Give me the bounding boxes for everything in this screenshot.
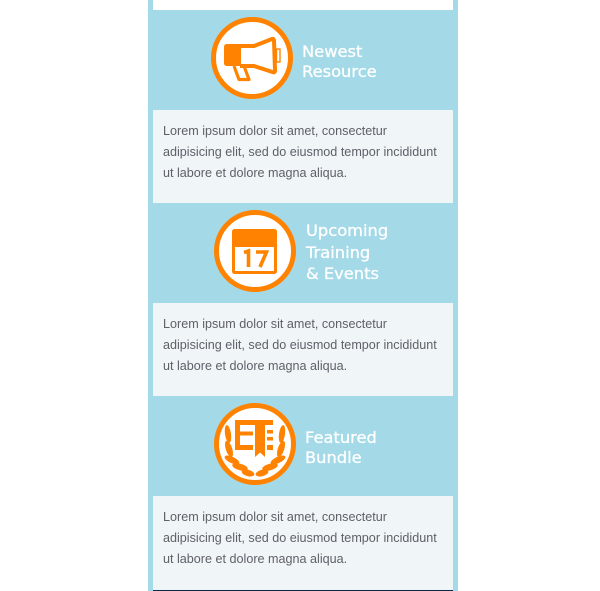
heading: Upcoming Training & Events: & Events (306, 264, 379, 283)
heading: Upcoming Training & Events (306, 221, 388, 283)
heading: Upcoming Training & Events: Training (306, 243, 370, 262)
heading: Newest Resource: Newest (302, 42, 362, 61)
panel: featured bundle text: adipisicing elit, sed do eiusmod tempor incididunt (163, 531, 437, 545)
panel: training text: adipisicing elit, sed do eiusmod tempor incididunt (163, 338, 437, 352)
heading: Featured Bundle: Bundle (305, 448, 362, 467)
top white panel (153, 0, 453, 10)
panel: featured bundle text: ut labore et dolore magna aliqua. (163, 552, 347, 566)
dark bottom edge (153, 590, 453, 591)
icon: laurel badge (214, 403, 296, 485)
icon: calendar (214, 210, 296, 292)
heading: Newest Resource: Resource (302, 62, 377, 81)
panel: training text: ut labore et dolore magna aliqua. (163, 359, 347, 373)
background column (148, 0, 458, 591)
heading: Featured Bundle: Featured (305, 428, 377, 447)
panel: newest resource text: Lorem ipsum dolor sit amet, consectetur (163, 124, 387, 138)
panel: newest resource text: adipisicing elit, sed do eiusmod tempor incididunt (163, 145, 437, 159)
heading: Newest Resource (302, 42, 377, 81)
panel: featured bundle text (153, 496, 453, 590)
heading: Featured Bundle (305, 428, 377, 467)
panel: featured bundle text: Lorem ipsum dolor sit amet, consectetur (163, 510, 387, 524)
panel: training text: Lorem ipsum dolor sit amet, consectetur (163, 317, 387, 331)
heading: Upcoming Training & Events: Upcoming (306, 221, 388, 240)
panel: newest resource text (153, 110, 453, 203)
icon: megaphone (211, 17, 293, 99)
panel: training text (153, 303, 453, 396)
panel: newest resource text: ut labore et dolore magna aliqua. (163, 166, 347, 180)
